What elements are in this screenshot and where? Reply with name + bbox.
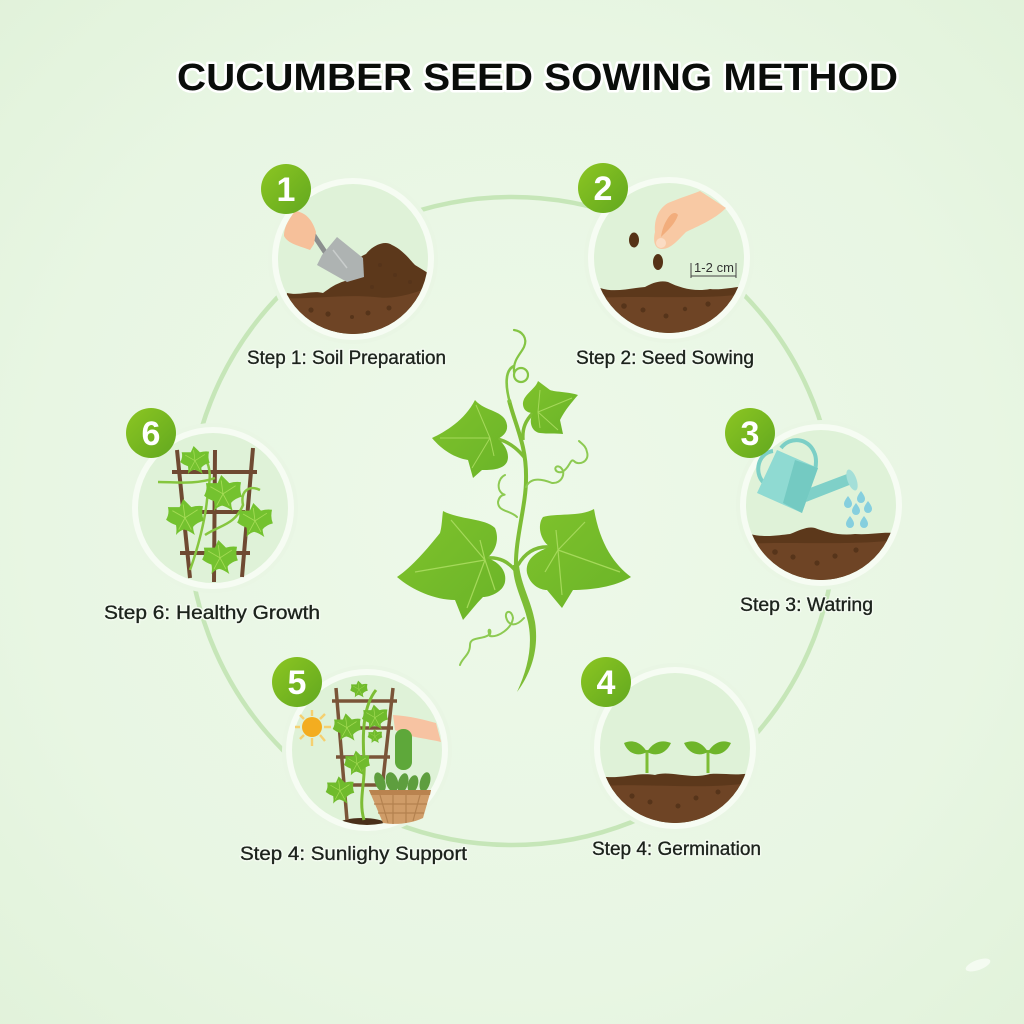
big left leaf bbox=[397, 511, 505, 620]
trellis bbox=[172, 448, 257, 582]
soil bbox=[752, 528, 891, 580]
panel: step 2 seed sowing bbox=[578, 163, 754, 343]
number 3: 3 bbox=[741, 415, 759, 453]
circle halo bbox=[736, 420, 906, 590]
panel: step 4 germination bbox=[581, 657, 760, 833]
badge 3 bbox=[725, 408, 775, 458]
badge 5 bbox=[272, 657, 322, 707]
main stem bbox=[507, 366, 536, 692]
badge 4 bbox=[581, 657, 631, 707]
hand bbox=[284, 211, 316, 250]
circle halo bbox=[128, 423, 298, 593]
label: step 5 sunlight support: Step 4: Sunlighy Support bbox=[240, 844, 468, 865]
label: step 4 germination: Step 4: Germination bbox=[592, 839, 761, 860]
number 5: 5 bbox=[288, 664, 306, 702]
label: step 3: Step 3: Watring bbox=[740, 595, 873, 616]
watering can bbox=[757, 440, 860, 513]
hand bbox=[393, 715, 441, 742]
circle halo bbox=[584, 173, 754, 343]
number 6: 6 bbox=[142, 415, 160, 453]
leaves bbox=[326, 681, 388, 804]
label: step 3: Step 3: Watring bbox=[740, 595, 873, 616]
number 1: 1 bbox=[277, 171, 295, 209]
number 2: 2 bbox=[594, 170, 612, 208]
soil bbox=[606, 774, 746, 823]
label: step 5 sunlight support: Step 4: Sunlighy Support bbox=[240, 844, 468, 865]
central plant illustration bbox=[397, 330, 631, 692]
hand with seeds bbox=[654, 191, 726, 249]
climbing stem bbox=[362, 690, 376, 820]
panel: step 6 healthy growth bbox=[126, 408, 298, 593]
circle frame bbox=[591, 180, 747, 336]
title: CUCUMBER SEED SOWING METHOD bbox=[177, 57, 898, 99]
label: step 6: Step 6: Healthy Growth bbox=[104, 603, 320, 624]
circle frame bbox=[597, 670, 753, 826]
circle frame bbox=[289, 672, 445, 828]
number 4: 4 bbox=[597, 664, 616, 702]
badge 1 bbox=[261, 164, 311, 214]
trellis bbox=[332, 688, 397, 820]
soil mound bbox=[286, 243, 427, 334]
circle halo bbox=[282, 665, 452, 835]
badge 2 bbox=[578, 163, 628, 213]
circle frame bbox=[743, 427, 899, 583]
big right leaf bbox=[527, 509, 631, 608]
depth measure 1-2 cm: 1-2 cm bbox=[694, 260, 734, 275]
soil base bbox=[342, 818, 384, 825]
soil bbox=[600, 281, 738, 333]
label: step 2: Step 2: Seed Sowing bbox=[576, 348, 754, 369]
leaf petioles bbox=[487, 413, 550, 570]
circle frame bbox=[275, 181, 431, 337]
vine bbox=[158, 458, 260, 570]
leaves bbox=[166, 446, 273, 574]
side tendrils bbox=[460, 441, 587, 665]
sparkle bbox=[964, 956, 992, 974]
top tendril bbox=[514, 330, 528, 382]
seeds bbox=[629, 232, 663, 270]
panel: step 1 soil preparation bbox=[261, 164, 438, 344]
upper left leaf bbox=[432, 400, 508, 478]
basket with cucumbers bbox=[369, 771, 432, 824]
upper right leaf bbox=[523, 381, 578, 434]
water drops bbox=[844, 491, 872, 528]
label: step 6: Step 6: Healthy Growth bbox=[104, 603, 320, 624]
label: step 4 germination: Step 4: Germination bbox=[592, 839, 761, 860]
trowel bbox=[313, 234, 332, 256]
badge 6 bbox=[126, 408, 176, 458]
label: step 1: Step 1: Soil Preparation bbox=[247, 348, 446, 369]
circle frame bbox=[135, 430, 291, 586]
sprouts bbox=[624, 741, 731, 773]
circle halo bbox=[590, 663, 760, 833]
panel: step 5 sunlight and support bbox=[272, 657, 452, 835]
label: step 1: Step 1: Soil Preparation bbox=[247, 348, 446, 369]
connecting ring bbox=[188, 197, 836, 845]
label: step 2: Step 2: Seed Sowing bbox=[576, 348, 754, 369]
cucumber bbox=[395, 729, 412, 770]
circle halo bbox=[268, 174, 438, 344]
sun bbox=[295, 710, 331, 746]
panel: step 3 watering bbox=[725, 408, 906, 590]
